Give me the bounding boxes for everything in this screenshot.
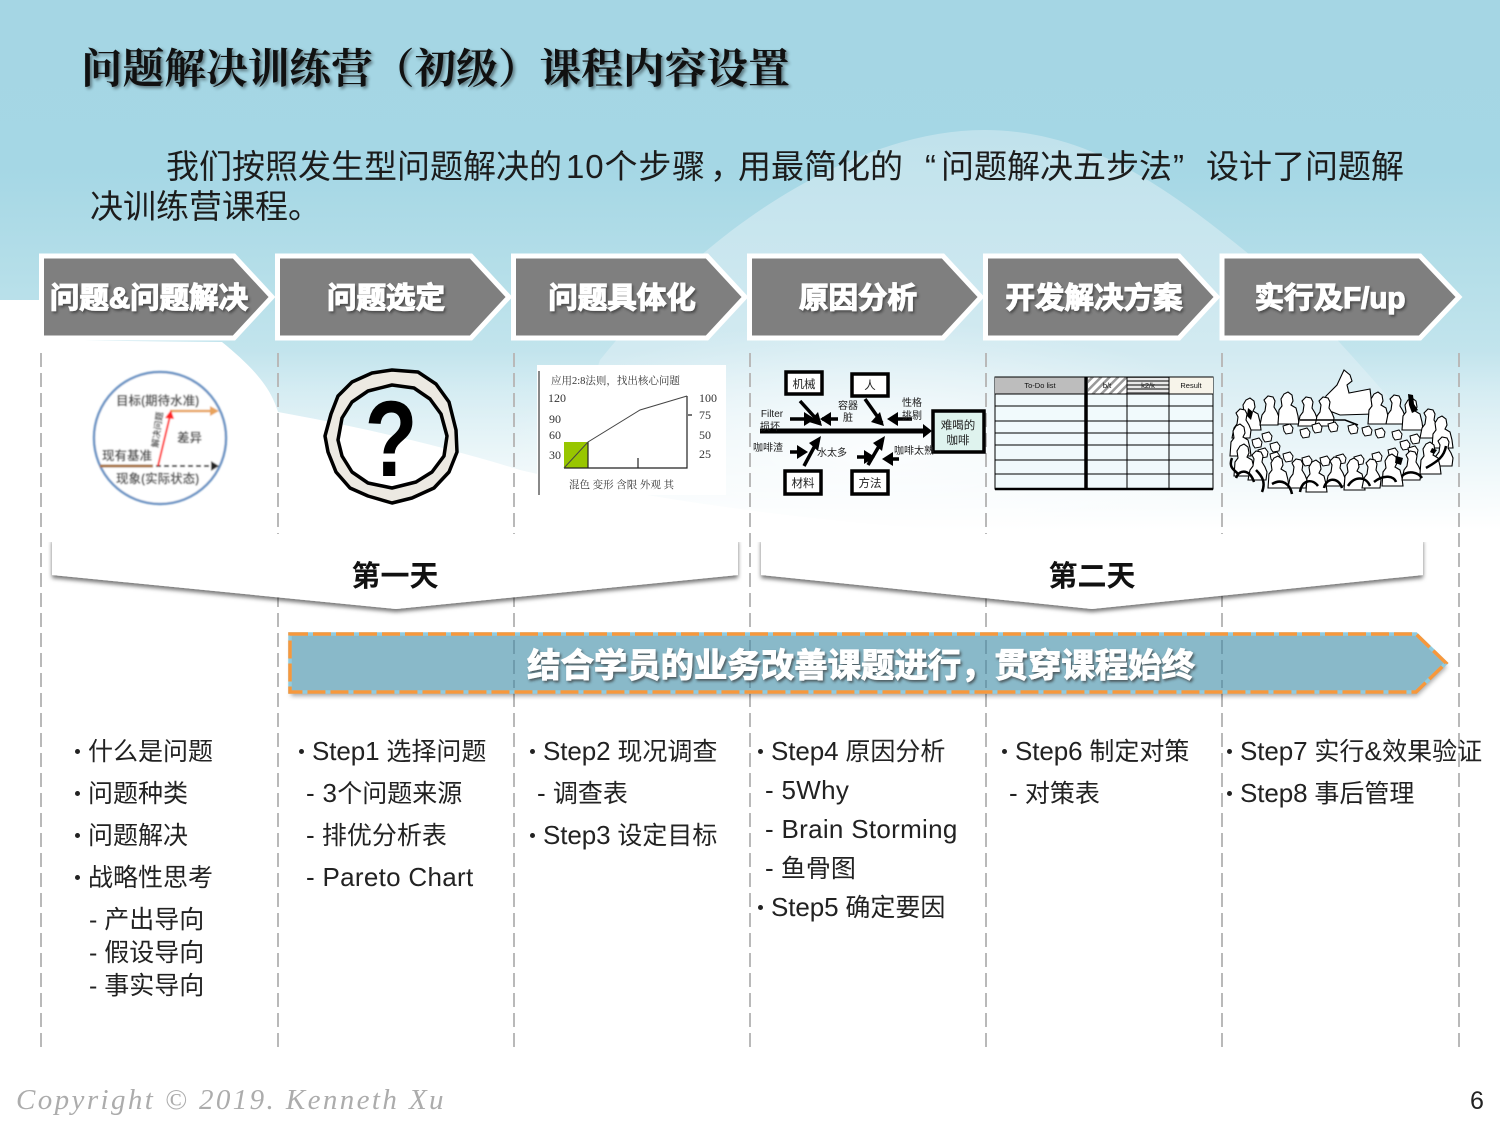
column 4 text <box>758 736 958 922</box>
icon: fishbone diagram: 机械 <box>792 377 816 391</box>
column 1 text: 问题种类 <box>88 780 188 808</box>
column 3 text <box>530 736 717 850</box>
chevron 3 <box>514 256 745 338</box>
intro paragraph <box>90 148 1404 225</box>
icon: fishbone diagram: 材料 <box>792 476 815 490</box>
icon: pareto chart: 120 <box>548 391 566 405</box>
icon: pareto chart: 混色 变形 含限 外观 其 <box>569 478 674 491</box>
dashed orange banner arrow: 结合学员的业务改善课题进行，贯穿课程始终 <box>527 648 1196 685</box>
icon: countermeasure table: Result <box>1180 381 1203 390</box>
column 3 text: Step2 现况调查 <box>543 736 717 766</box>
icon: pareto chart: 应用2:8法则，找出核心问题 <box>551 374 680 387</box>
column 3 text: Step3 设定目标 <box>543 820 717 850</box>
icon: fishbone diagram: 损坏 <box>760 420 780 433</box>
intro paragraph: 用最简化的 <box>738 148 903 185</box>
icon: pareto chart: 30 <box>549 448 561 462</box>
column 2 text: Step1 选择问题 <box>312 736 486 766</box>
process chevrons: 实行及F/up <box>1255 282 1405 315</box>
column 6 text: Step7 实行&效果验证 <box>1240 736 1482 766</box>
chevron 2 <box>278 256 509 338</box>
icon: fishbone diagram: 咖啡 <box>946 433 970 447</box>
icon: pareto chart: 90 <box>549 412 561 426</box>
icon: fishbone diagram: 挑剔 <box>902 409 922 422</box>
icon: fishbone diagram: 咖啡太熟 <box>894 444 934 457</box>
day one brace: 第一天 <box>351 560 439 593</box>
icon: fishbone diagram: 水太多 <box>817 446 847 459</box>
copyright footer: Copyright © 2019. Kenneth Xu <box>16 1084 446 1116</box>
process chevrons: 开发解决方案 <box>1005 282 1183 315</box>
icon: fishbone diagram: 人 <box>864 379 876 392</box>
icon: gap circle diagram: 解决问题 <box>149 411 165 448</box>
icon: fishbone diagram: 咖啡渣 <box>753 441 783 454</box>
column 1 text <box>75 738 213 1000</box>
column 1 text: 战略性思考 <box>88 864 213 892</box>
column 2 text <box>299 736 486 892</box>
chevron 1 <box>42 256 272 338</box>
column 4 text: - 鱼骨图 <box>765 853 856 883</box>
intro paragraph: “ <box>925 148 936 185</box>
column 6 text <box>1227 736 1482 808</box>
column 3 text: - 调查表 <box>537 778 628 808</box>
icon: countermeasure table: k2/k <box>1141 381 1155 390</box>
column 1 text: - 假设导向 <box>89 939 204 967</box>
process chevrons: 问题&问题解决 <box>50 282 249 315</box>
icon: fishbone diagram: 容器 <box>838 399 858 412</box>
icon: fishbone diagram: Filter <box>761 409 784 420</box>
column 4 text: - 5Why <box>765 775 849 805</box>
intro paragraph: 设计了问题解 <box>1206 148 1404 185</box>
column 2 text: - Pareto Chart <box>306 862 474 892</box>
chevron 6 <box>1222 256 1459 338</box>
title: 问题解决训练营（初级）课程内容设置 <box>81 47 790 93</box>
icon: gap circle diagram: 目标(期待水准) <box>116 393 199 408</box>
column 1 text: - 事实导向 <box>89 972 204 1000</box>
icon: pareto chart: 25 <box>699 447 711 461</box>
icon: question mark badge: ? <box>365 378 417 499</box>
icon: gap circle diagram: 现象(实际状态) <box>116 471 199 486</box>
column 4 text: - Brain Storming <box>765 814 958 844</box>
intro paragraph: 问题解决五步法 <box>941 148 1172 185</box>
process chevrons: 问题具体化 <box>548 282 696 315</box>
icon: gap circle diagram: 差异 <box>177 430 202 445</box>
icon: fishbone diagram: 方法 <box>858 476 882 490</box>
icon: pareto chart: 60 <box>549 428 561 442</box>
process chevrons: 问题选定 <box>327 282 445 315</box>
column 6 text: Step8 事后管理 <box>1240 778 1414 808</box>
icon: fishbone diagram: 性格 <box>902 396 922 409</box>
chevron 4 <box>750 256 981 338</box>
column 5 text <box>1002 736 1189 808</box>
column 1 text: 什么是问题 <box>88 738 213 766</box>
intro paragraph: 10个步骤 <box>566 148 706 185</box>
intro paragraph: ， <box>710 148 743 185</box>
page number: 6 <box>1470 1087 1484 1115</box>
icon: fishbone diagram: 脏 <box>843 411 853 424</box>
column 1 text: 问题解决 <box>88 822 188 850</box>
intro paragraph: 我们按照发生型问题解决的 <box>166 148 562 185</box>
day two brace: 第二天 <box>1048 560 1136 593</box>
icon: countermeasure table: b/t <box>1103 381 1112 390</box>
icon: pareto chart: 100 <box>699 391 717 405</box>
column 5 text: Step6 制定对策 <box>1015 736 1189 766</box>
column 4 text: Step5 确定要因 <box>771 892 945 922</box>
intro paragraph: ” <box>1173 148 1184 185</box>
column 4 text: Step4 原因分析 <box>771 736 945 766</box>
column 2 text: - 3个问题来源 <box>306 778 462 808</box>
icon: fishbone diagram: 难喝的 <box>941 418 975 432</box>
intro paragraph: 决训练营课程。 <box>90 188 321 225</box>
process chevrons: 原因分析 <box>799 282 917 315</box>
icon: pareto chart: 75 <box>699 408 711 422</box>
column 1 text: - 产出导向 <box>89 906 204 934</box>
column 5 text: - 对策表 <box>1009 778 1100 808</box>
icon: gap circle diagram: 现有基准 <box>102 448 153 463</box>
icon: countermeasure table: To-Do list <box>1024 381 1057 390</box>
chevron 5 <box>986 256 1217 338</box>
column 2 text: - 排优分析表 <box>306 820 447 850</box>
icon: pareto chart: 50 <box>699 428 711 442</box>
